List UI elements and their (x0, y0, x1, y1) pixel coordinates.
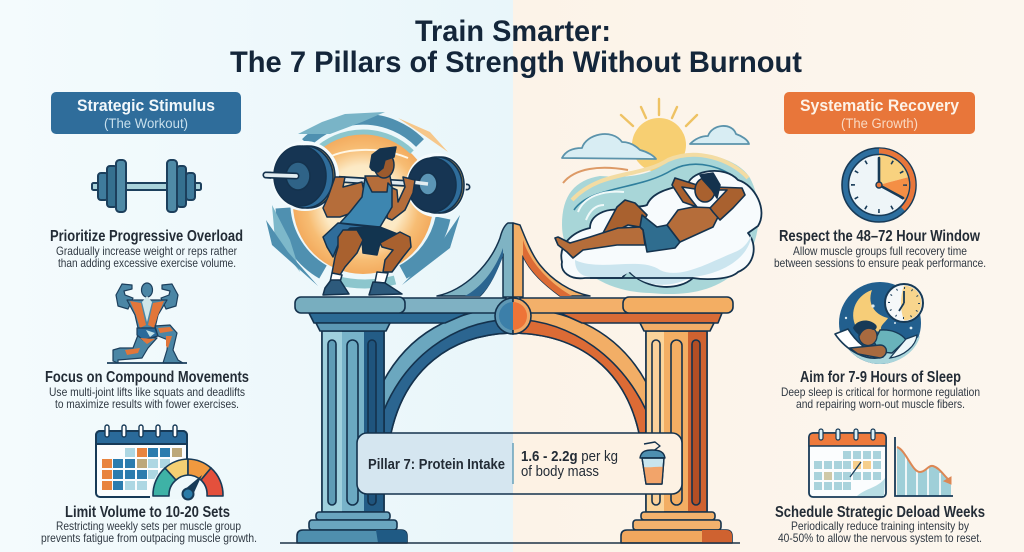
icon: muscle figure lunge (107, 283, 187, 363)
pillar: right (520, 297, 733, 543)
icon: calendar with volume gauge (96, 425, 224, 500)
illustration: resting man on cloud (555, 99, 761, 294)
text block: respect the window: Respect the 48–72 Hour Window (779, 228, 981, 245)
sky clouds (562, 126, 749, 159)
text block: limit volume: Restricting weekly sets per muscle group (56, 519, 241, 533)
center keystone (495, 298, 531, 334)
callout: pillar 7 protein intake: 1.6 - 2.2g per kg (521, 449, 618, 465)
text block: schedule deload weeks: Schedule Strategic Deload Weeks (775, 504, 985, 521)
icon: deload calendar and chart (809, 429, 953, 497)
teal wave circle (562, 154, 759, 294)
barbell (266, 143, 467, 215)
panel: strategic stimulus badge (51, 92, 241, 134)
text block: aim for sleep: and repairing worn-out muscle fibers. (796, 397, 965, 411)
icon: protein shaker (640, 442, 665, 484)
title: Train Smarter: (415, 15, 611, 48)
text block: limit volume: prevents fatigue from outpacing muscle growth. (41, 531, 257, 545)
text block: schedule deload weeks: 40-50% to allow the nervous system to reset. (778, 531, 982, 545)
callout: pillar 7 protein intake: Pillar 7: Protein Intake (368, 457, 505, 473)
icon: sleep with clock (835, 282, 923, 364)
text block: focus on compound movements: to maximize results with fower exercises. (55, 397, 239, 411)
text block: prioritize progressive overload (50, 228, 243, 270)
title (230, 15, 802, 79)
text block: schedule deload weeks: Periodically reduce training intensity by (791, 519, 969, 533)
panel: systematic recovery badge (784, 92, 975, 134)
sun (621, 99, 697, 172)
text block: limit volume: Limit Volume to 10-20 Sets (65, 504, 230, 521)
lifter body (323, 147, 415, 295)
upper suspension curves (437, 223, 590, 297)
text block: respect the window: between sessions to ensure peak performance. (774, 256, 986, 270)
pillar: left (295, 297, 506, 543)
ground line (280, 542, 740, 544)
text block: aim for sleep: Deep sleep is critical for hormone regulation (781, 385, 980, 399)
panel: strategic stimulus badge: Strategic Stimulus (77, 96, 215, 115)
bridge structure (280, 223, 740, 543)
icon: dumbbell (92, 160, 201, 212)
text block: aim for sleep: Aim for 7-9 Hours of Sleep (800, 369, 961, 386)
text block: schedule deload weeks (775, 504, 985, 545)
panel: systematic recovery badge: (The Growth) (841, 116, 918, 131)
callout: pillar 7 protein intake: of body mass (521, 464, 599, 480)
icon: recovery clock (842, 148, 916, 222)
text block: focus on compound movements: Use multi-joint lifts like squats and deadlifts (49, 385, 245, 399)
panel: strategic stimulus badge: (The Workout) (104, 116, 188, 131)
text block: limit volume (41, 504, 257, 545)
cloud (561, 171, 761, 287)
resting man body (555, 173, 745, 258)
callout: pillar 7 protein intake (357, 433, 682, 494)
title: The 7 Pillars of Strength Without Burnout (230, 46, 802, 79)
text block: respect the window (774, 228, 986, 270)
illustration: lifter with swirl (266, 112, 467, 295)
text block: aim for sleep (781, 369, 980, 411)
text block: respect the window: Allow muscle groups full recovery time (793, 244, 967, 258)
swirl energy background (266, 112, 460, 286)
text block: prioritize progressive overload: than adding excessive exercise volume. (58, 256, 236, 270)
text block: focus on compound movements: Focus on Compound Movements (45, 369, 249, 386)
panel: systematic recovery badge: Systematic Recovery (800, 96, 960, 115)
text block: focus on compound movements (45, 369, 249, 411)
text block: prioritize progressive overload: Gradually increase weight or reps rather (56, 244, 237, 258)
text block: prioritize progressive overload: Prioritize Progressive Overload (50, 228, 243, 245)
arch (383, 307, 646, 433)
